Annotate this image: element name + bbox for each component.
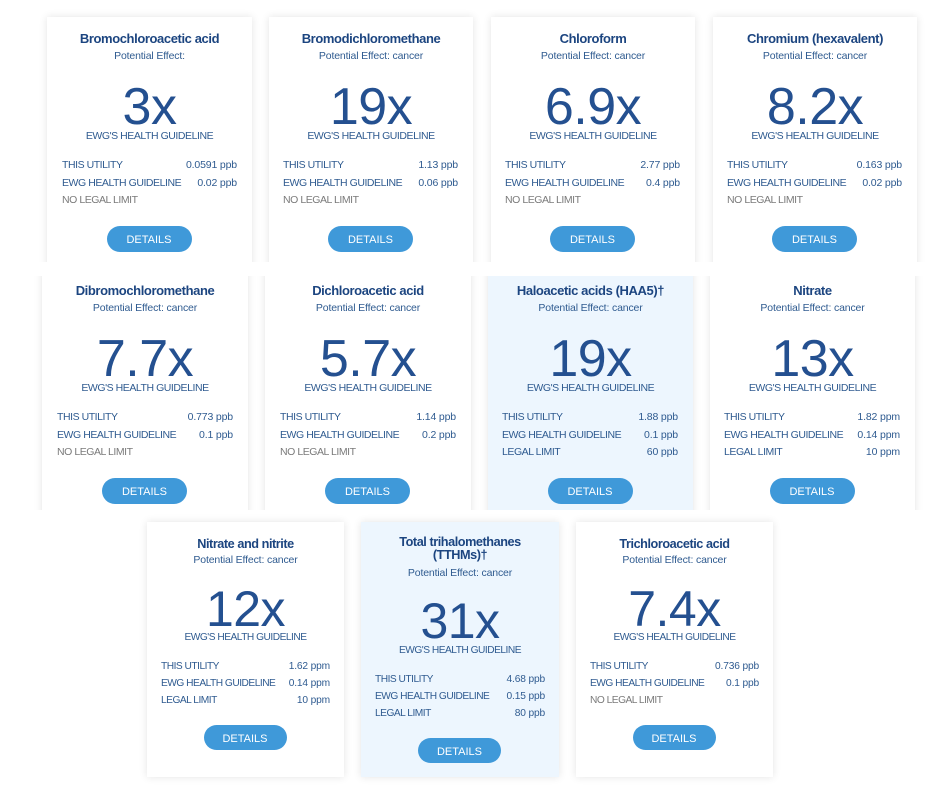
details button: DETAILS — [792, 234, 837, 246]
details button — [204, 725, 286, 750]
card: Bromochloroacetic acid — [47, 17, 252, 277]
details button — [418, 738, 501, 763]
details button: DETAILS — [126, 234, 172, 246]
heading: Dibromochloromethane — [76, 283, 214, 298]
row 1 of contaminant cards — [45, 15, 919, 262]
potential effect: Potential Effect: cancer — [541, 50, 645, 62]
details button — [106, 226, 192, 252]
legal limit value: 10 ppm — [866, 446, 900, 458]
multiplier caption: EWG'S HEALTH GUIDELINE — [749, 382, 876, 394]
details button — [328, 226, 413, 252]
potential effect: Potential Effect: cancer — [538, 302, 643, 314]
legal limit label: LEGAL LIMIT — [724, 446, 782, 458]
potential effect: Potential Effect: cancer — [319, 50, 423, 62]
guideline value: 0.06 ppb — [418, 177, 458, 189]
heading: Nitrate — [793, 283, 832, 298]
utility value: 0.736 ppb — [715, 661, 759, 672]
card: Bromodichloromethane — [269, 17, 473, 277]
heading: Total trihalomethanes — [399, 535, 521, 549]
guideline value: 0.1 ppb — [644, 429, 678, 441]
potential effect: Potential Effect: cancer — [193, 554, 298, 566]
card: Nitrate — [710, 269, 915, 529]
multiplier: 7.4x — [628, 581, 721, 637]
guideline label: EWG HEALTH GUIDELINE — [590, 678, 704, 689]
details button — [772, 226, 857, 252]
heading: Trichloroacetic acid — [619, 537, 730, 551]
heading: Nitrate and nitrite — [197, 537, 294, 551]
utility value: 1.88 ppb — [638, 411, 678, 423]
guideline value: 0.1 ppb — [199, 429, 233, 441]
utility value: 2.77 ppb — [640, 159, 680, 171]
utility value: 0.163 ppb — [857, 159, 902, 171]
legal limit label: LEGAL LIMIT — [502, 446, 560, 458]
guideline label: EWG HEALTH GUIDELINE — [724, 429, 843, 441]
potential effect: Potential Effect: cancer — [316, 302, 420, 314]
guideline value: 0.14 ppm — [289, 678, 330, 689]
guideline label: EWG HEALTH GUIDELINE — [57, 429, 176, 441]
multiplier caption: EWG'S HEALTH GUIDELINE — [307, 130, 435, 142]
heading: Dichloroacetic acid — [312, 283, 424, 298]
utility label: THIS UTILITY — [62, 159, 123, 171]
utility value: 1.62 ppm — [289, 661, 330, 672]
guideline value: 0.14 ppm — [857, 429, 900, 441]
utility label: THIS UTILITY — [57, 411, 118, 423]
details button — [325, 478, 410, 504]
multiplier: 8.2x — [767, 78, 863, 136]
utility label: THIS UTILITY — [590, 661, 648, 672]
heading — [399, 535, 521, 562]
potential effect: Potential Effect: cancer — [622, 554, 727, 566]
card: Dichloroacetic acid — [265, 269, 471, 529]
utility value: 0.0591 ppb — [186, 159, 237, 171]
multiplier: 3x — [123, 78, 176, 136]
guideline value: 0.02 ppb — [197, 177, 237, 189]
multiplier caption: EWG'S HEALTH GUIDELINE — [529, 130, 657, 142]
multiplier: 6.9x — [545, 78, 641, 136]
utility label: THIS UTILITY — [505, 159, 566, 171]
potential effect: Potential Effect: cancer — [408, 567, 512, 579]
details button: DETAILS — [345, 486, 390, 498]
utility value: 1.13 ppb — [418, 159, 458, 171]
multiplier: 31x — [420, 593, 500, 649]
utility value: 0.773 ppb — [188, 411, 233, 423]
multiplier: 5.7x — [320, 330, 416, 388]
multiplier: 19x — [330, 78, 412, 136]
details button — [550, 226, 635, 252]
legal limit value: 80 ppb — [515, 708, 545, 719]
guideline value: 0.1 ppb — [726, 678, 759, 689]
multiplier: 19x — [549, 330, 632, 388]
guideline label: EWG HEALTH GUIDELINE — [62, 177, 181, 189]
utility label: THIS UTILITY — [280, 411, 341, 423]
details button — [632, 725, 716, 750]
multiplier caption: EWG'S HEALTH GUIDELINE — [184, 632, 307, 643]
details button: DETAILS — [222, 733, 268, 745]
legal limit label: NO LEGAL LIMIT — [57, 446, 133, 458]
card: Trichloroacetic acid — [576, 522, 773, 777]
multiplier: 7.7x — [97, 330, 193, 388]
details button — [548, 478, 632, 504]
utility label: THIS UTILITY — [502, 411, 563, 423]
guideline label: EWG HEALTH GUIDELINE — [727, 177, 846, 189]
guideline label: EWG HEALTH GUIDELINE — [505, 177, 624, 189]
guideline label: EWG HEALTH GUIDELINE — [283, 177, 402, 189]
legal limit label: NO LEGAL LIMIT — [590, 695, 662, 706]
utility label: THIS UTILITY — [283, 159, 344, 171]
potential effect: Potential Effect: cancer — [760, 302, 865, 314]
multiplier: 13x — [771, 330, 854, 388]
utility label: THIS UTILITY — [375, 674, 433, 685]
utility value: 1.82 ppm — [857, 411, 900, 423]
card: Chromium (hexavalent) — [713, 17, 917, 277]
legal limit label: NO LEGAL LIMIT — [62, 194, 138, 206]
guideline label: EWG HEALTH GUIDELINE — [375, 691, 489, 702]
details button: DETAILS — [348, 234, 393, 246]
guideline value: 0.02 ppb — [862, 177, 902, 189]
heading: Haloacetic acids (HAA5)† — [517, 283, 664, 298]
guideline label: EWG HEALTH GUIDELINE — [280, 429, 399, 441]
multiplier caption: EWG'S HEALTH GUIDELINE — [751, 130, 879, 142]
heading: Chloroform — [560, 31, 626, 46]
row 2 of contaminant cards — [40, 276, 917, 510]
multiplier: 12x — [206, 581, 285, 637]
heading: Bromodichloromethane — [302, 31, 440, 46]
guideline label: EWG HEALTH GUIDELINE — [502, 429, 621, 441]
potential effect: Potential Effect: — [114, 50, 185, 62]
details button: DETAILS — [122, 486, 167, 498]
details button: DETAILS — [437, 746, 482, 758]
details button: DETAILS — [570, 234, 615, 246]
card: Dibromochloromethane — [42, 269, 248, 529]
details button — [102, 478, 187, 504]
legal limit label: NO LEGAL LIMIT — [280, 446, 356, 458]
guideline label: EWG HEALTH GUIDELINE — [161, 678, 275, 689]
details button — [770, 478, 854, 504]
multiplier caption: EWG'S HEALTH GUIDELINE — [304, 382, 432, 394]
utility label: THIS UTILITY — [161, 661, 219, 672]
legal limit label: LEGAL LIMIT — [161, 695, 217, 706]
heading: Chromium (hexavalent) — [747, 31, 883, 46]
guideline value: 0.4 ppb — [646, 177, 680, 189]
utility value: 1.14 ppb — [416, 411, 456, 423]
heading: Bromochloroacetic acid — [80, 31, 219, 46]
details button: DETAILS — [789, 486, 835, 498]
utility label: THIS UTILITY — [727, 159, 788, 171]
card: Total trihalomethanes — [361, 522, 559, 777]
row 3 of contaminant cards — [145, 520, 775, 779]
legal limit label: LEGAL LIMIT — [375, 708, 431, 719]
multiplier caption: EWG'S HEALTH GUIDELINE — [81, 382, 209, 394]
card: Nitrate and nitrite — [147, 522, 344, 777]
potential effect: Potential Effect: cancer — [763, 50, 867, 62]
legal limit value: 60 ppb — [647, 446, 678, 458]
legal limit label: NO LEGAL LIMIT — [505, 194, 581, 206]
potential effect: Potential Effect: cancer — [93, 302, 197, 314]
guideline value: 0.15 ppb — [507, 691, 545, 702]
heading: (TTHMs)† — [433, 548, 487, 562]
card: Haloacetic acids (HAA5) — [488, 269, 693, 529]
utility value: 4.68 ppb — [507, 674, 545, 685]
multiplier caption: EWG'S HEALTH GUIDELINE — [613, 632, 736, 643]
details button: DETAILS — [567, 486, 613, 498]
multiplier caption: EWG'S HEALTH GUIDELINE — [527, 382, 654, 394]
utility label: THIS UTILITY — [724, 411, 785, 423]
guideline value: 0.2 ppb — [422, 429, 456, 441]
card: Chloroform — [491, 17, 695, 277]
multiplier caption: EWG'S HEALTH GUIDELINE — [399, 645, 521, 656]
details button: DETAILS — [651, 733, 697, 745]
legal limit label: NO LEGAL LIMIT — [727, 194, 803, 206]
legal limit value: 10 ppm — [297, 695, 330, 706]
legal limit label: NO LEGAL LIMIT — [283, 194, 359, 206]
multiplier caption: EWG'S HEALTH GUIDELINE — [86, 130, 213, 142]
